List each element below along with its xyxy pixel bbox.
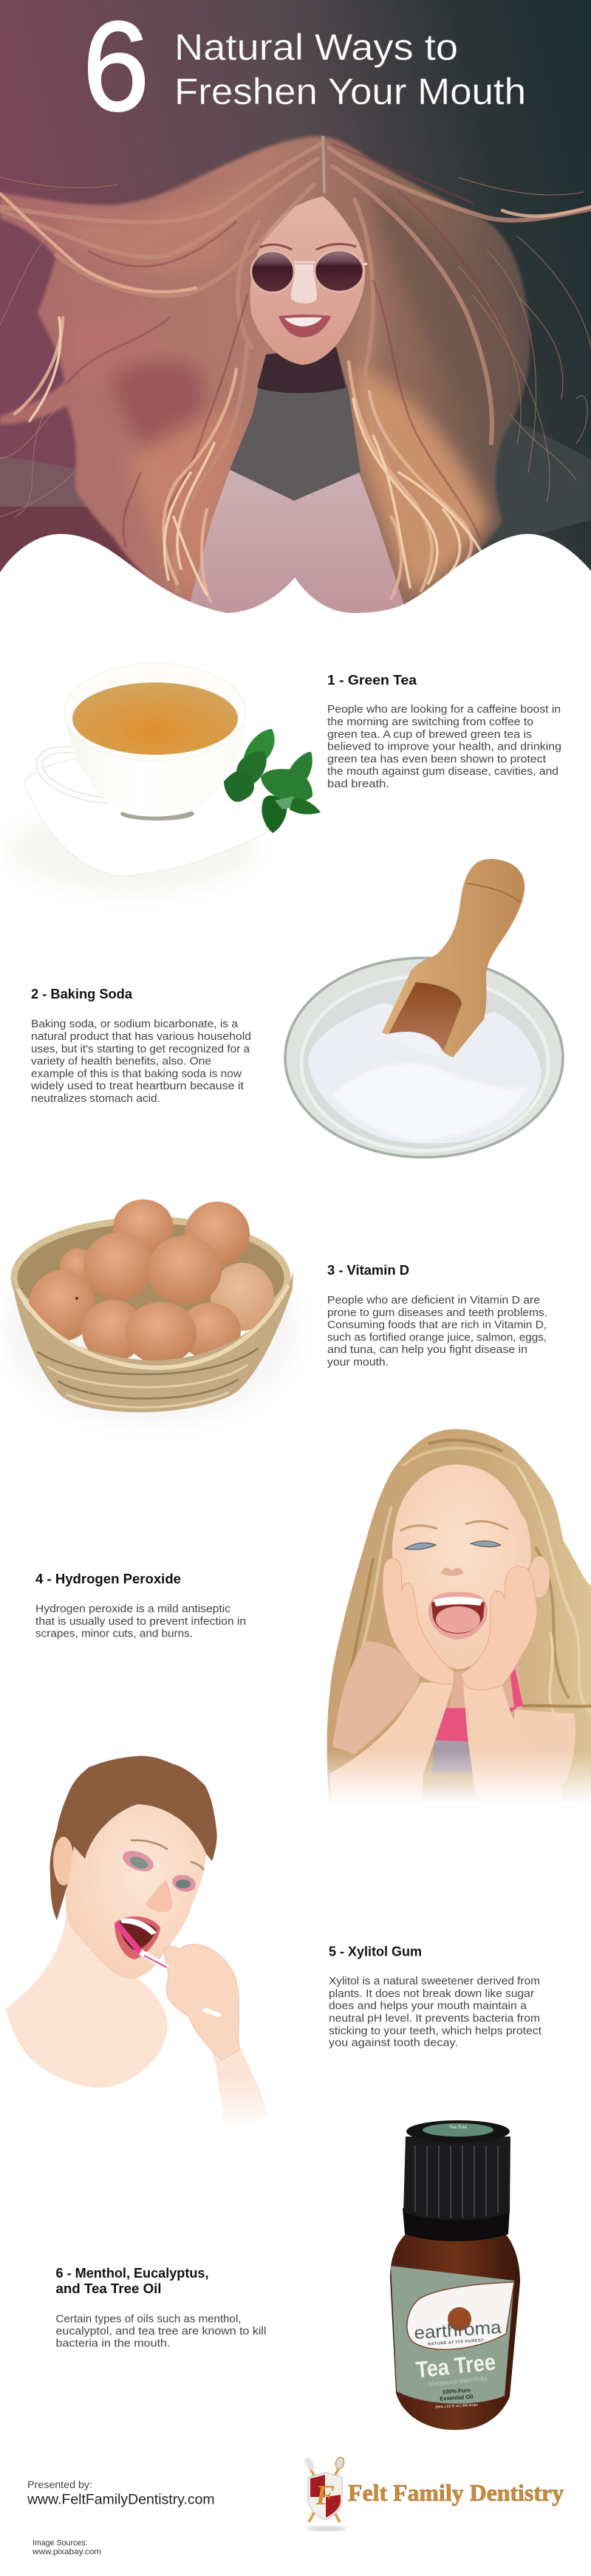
text: vitamin d body: your mouth. [327,1357,389,1368]
text: hydrogen peroxide body: scrapes, minor cuts, and burns. [35,1628,193,1640]
heading: hydrogen peroxide: 4 - Hydrogen Peroxide [35,1572,181,1586]
mint leaves [224,729,321,833]
logo wordmark: Felt Family Dentistry [348,2479,564,2506]
text: baking soda body: neutralizes stomach acid. [31,1093,160,1105]
purity text [440,2387,474,2402]
photo: laughing girl [318,1429,591,1803]
white logo area [407,2282,514,2349]
hair strands [0,144,591,602]
panel: 5 xylitol gum [6,1755,542,2134]
panel: 6 oils [56,2120,520,2430]
logo: felt family dentistry [304,2456,564,2531]
shield red quarters [310,2475,341,2518]
upper arm [510,1710,575,1781]
nose [291,264,317,304]
text: xylitol gum body [329,1976,542,2049]
text: vitamin d body: and tuna, can help you fight disease in [327,1344,527,1356]
product name: Tea Tree [414,2349,496,2383]
hands [383,1558,537,1690]
open mouth [428,1592,488,1640]
chest and neck [6,1913,168,2088]
text: green tea body: believed to improve your health, and drinking [327,741,561,753]
cup rim [64,663,246,761]
text: baking soda body: variety of health benefits, also. One [31,1056,211,1068]
photo: tea tree oil bottle [390,2120,520,2430]
turtleneck collar shadow [257,347,346,393]
latin name: Melaleuca alternifolia [428,2374,488,2388]
bottom fade [207,2075,281,2134]
neck shadow [449,1662,522,1713]
heading: vitamin d: 3 - Vitamin D [327,1263,409,1278]
wooden scoop [382,859,525,1058]
arm [207,2035,267,2131]
text: oils body: Certain types of oils such as menthol, [56,2313,241,2325]
text: vitamin d body: Consuming foods that are rich in Vitamin D, [327,1320,547,1332]
panel: 4 hydrogen peroxide [35,1429,591,1803]
text: oils body: bacteria in the mouth. [56,2338,170,2350]
cup base [120,807,194,821]
text: vitamin d body [327,1295,547,1368]
nose [146,1880,172,1912]
hair parting [323,136,324,193]
cup handle highlight [40,750,109,801]
volume text: 15mL | 1/2 fl. oz | 300 drops [435,2402,479,2409]
text: green tea body: green tea. A cup of brewed green tea is [327,729,532,741]
photo: eggs in basket [4,1199,299,1425]
heading: menthol, eucalyptus, tea tree oil: 6 - Menthol, Eucalyptus, [56,2266,208,2281]
nose [441,1568,464,1576]
text: green tea body: green tea has even been shown to protect [327,753,546,765]
glass bowl inner rim [301,976,548,1151]
hair [49,1755,217,1920]
text: baking soda body: Baking soda, or sodium bicarbonate, is a [31,1018,239,1030]
basket back rim [14,1220,287,1335]
brand logo mark [448,2307,471,2331]
cup handle [40,750,109,801]
text: oils body [56,2313,266,2350]
sleeves [0,419,591,574]
hair strands [338,1440,591,1736]
text: vitamin d body: prone to gum diseases and teeth problems. [327,1307,547,1319]
sunglasses [251,250,367,292]
cup body [66,724,247,817]
tagline: NATURE AT ITS PUREST [428,2338,485,2347]
text: xylitol gum body: plants. It does not break down like sugar [329,1988,534,2000]
photo: tea cup with mint [7,663,321,894]
text: oils body: eucalyptol, and tea tree are known to kill [56,2326,266,2337]
brand name: earthroma [414,2318,502,2343]
heading: baking soda: 2 - Baking Soda [31,987,133,1001]
text: green tea body [327,704,561,790]
powder over scoop [384,1032,448,1058]
cap ridges [415,2145,498,2218]
text: hydrogen peroxide body: that is usually used to prevent infection in [35,1616,246,1628]
powder highlights [332,1063,526,1141]
powder [308,1002,542,1143]
eyes with pink shadow [120,1847,197,1894]
scoop handle groove [467,883,520,902]
presented by: Presented by: [27,2479,92,2490]
white wave divider [0,534,591,617]
cap sticker [423,2123,493,2137]
text: baking soda body: uses, but it's starting to get recognized for a [31,1044,250,1055]
mouth [115,1916,160,1959]
text: green tea body: the mouth against gum disease, cavities, and [327,766,558,778]
cap top [406,2120,510,2142]
heading: green tea: 1 - Green Tea [327,673,417,688]
title text: Freshen Your Mouth [174,71,526,112]
eyebrows [260,244,356,250]
panel: 2 baking soda [30,859,563,1157]
photo: bowl of baking soda with scoop [285,859,563,1157]
pink shirt [434,1668,523,1743]
bottle cap [403,2137,510,2220]
panel: 3 vitamin d [4,1199,547,1425]
image sources: Image Sources: [33,2539,87,2548]
arms [329,1682,565,1802]
image sources: www.pixabay.com [32,2548,101,2557]
text: xylitol gum body: neutral pH level. It prevents bacteria from [329,2013,540,2025]
text: green tea body: People who are looking for a caffeine boost in [327,704,561,716]
eyebrows [131,1840,204,1870]
panel: footer [27,2456,564,2557]
text: baking soda body: widely used to treat heartburn because it [30,1080,244,1092]
text: xylitol gum body: does and helps your mouth maintain a [329,2001,527,2012]
text: baking soda body [30,1018,251,1105]
panel: 1 green tea [7,663,561,894]
face [250,196,365,365]
face [66,1804,206,1979]
eyes [405,1541,501,1549]
photo: woman brushing teeth [6,1755,281,2134]
crossed toothbrush and mirror [304,2456,345,2522]
text: vitamin d body: such as fortified orange juice, salmon, eggs, [327,1332,547,1344]
turtleneck [230,347,361,501]
amber bottle body [390,2230,520,2430]
panel: hero banner [0,0,591,617]
saucer shadow [7,805,259,894]
hero background gradient [0,0,591,617]
shield monogram: F [315,2480,335,2511]
image sources [32,2539,101,2557]
title text [177,32,524,105]
cap sticker: Tea Tree [449,2125,468,2130]
bottle cap skirt [403,2208,510,2241]
basket weave [18,1285,288,1408]
website url: www.FeltFamilyDentistry.com [27,2493,215,2508]
text: hydrogen peroxide body [35,1603,246,1640]
purity text: Essential Oil [440,2393,474,2402]
text: baking soda body: natural product that has various household [31,1031,251,1043]
smile [279,315,331,338]
text: xylitol gum body: Xylitol is a natural sweetener derived from [329,1976,540,1987]
purity text: 100% Pure [443,2387,471,2395]
text: green tea body: bad breath. [327,778,389,790]
title text: Natural Ways to [174,27,458,68]
sage label [391,2266,514,2404]
shoulder [332,1641,420,1754]
logo shadow [307,2527,346,2531]
eyebrows [400,1521,508,1531]
blouse [186,470,408,617]
text: xylitol gum body: sticking to your teeth, which helps protect [329,2025,542,2037]
text: baking soda body: example of this is that baking soda is now [31,1068,242,1080]
glass bowl [285,958,563,1157]
toothbrush [118,1925,219,2015]
heading: menthol, eucalyptus, tea tree oil [56,2266,208,2296]
ear [53,1837,74,1885]
text: hydrogen peroxide body: Hydrogen peroxide is a mild antiseptic [35,1603,230,1615]
hand [164,1945,240,2061]
soft background shadow [4,1233,299,1425]
basket front [12,1272,293,1412]
hair [327,1429,591,1802]
eggs [29,1199,274,1364]
text: xylitol gum body: you against tooth decay. [329,2038,458,2049]
photo: woman with flowing hair [0,136,591,617]
face [392,1465,531,1669]
saucer [24,753,267,877]
back hair mass [0,136,530,617]
heading: menthol, eucalyptus, tea tree oil: and Tea Tree Oil [56,2281,161,2296]
shield [308,2473,342,2520]
hair tonal masses [73,188,499,597]
tea surface [72,682,238,755]
scoop interior [389,982,462,1052]
text: vitamin d body: People who are deficient in Vitamin D are [327,1295,540,1306]
ear [529,1556,550,1597]
text: green tea body: the morning are switching from coffee to [327,716,533,728]
shirt shadow [432,1740,473,1772]
bottom fade [318,1750,591,1803]
heading: xylitol gum: 5 - Xylitol Gum [329,1945,422,1959]
